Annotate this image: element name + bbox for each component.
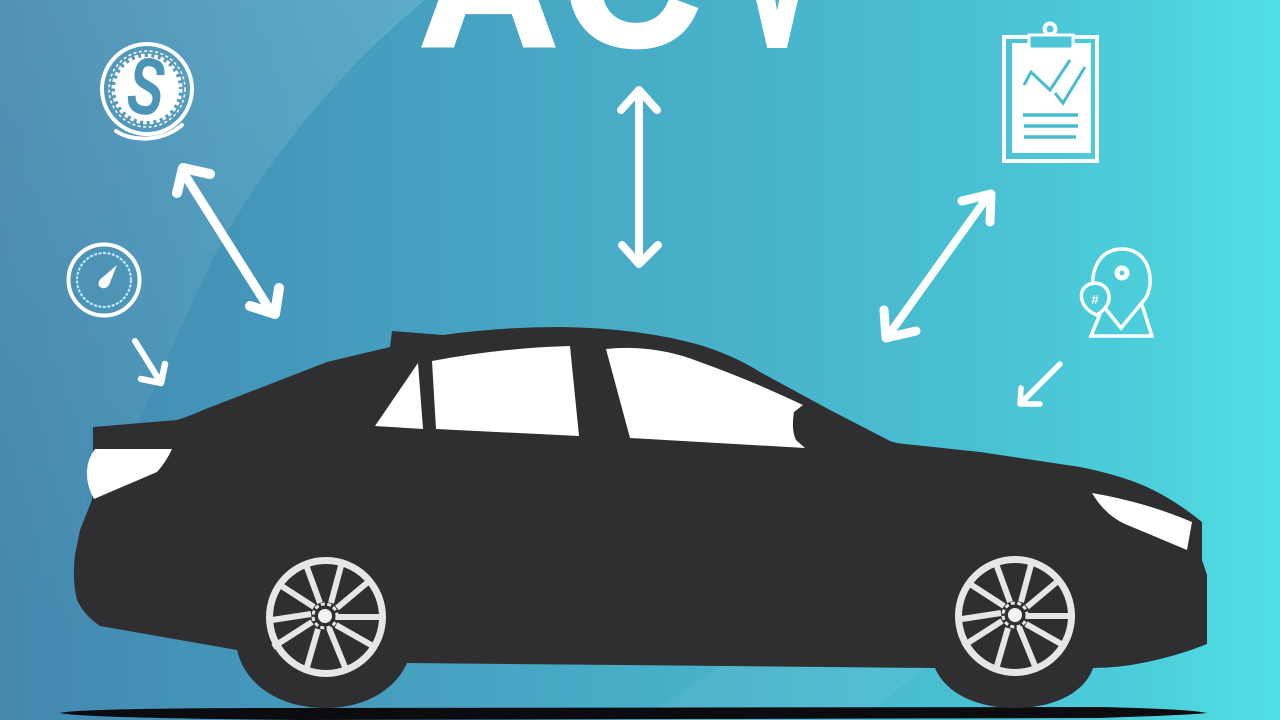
middle window [432, 346, 579, 436]
icon: dollar coin [102, 38, 192, 139]
icon: map location pin [1081, 249, 1152, 336]
car silhouette [74, 327, 1207, 708]
front window [606, 348, 805, 448]
icon: map location pin: # [1091, 292, 1099, 307]
icon: dollar coin: S [120, 38, 174, 134]
icon: speedometer gauge [68, 244, 140, 316]
arrow: clipboard to car [884, 194, 991, 338]
car body [74, 327, 1207, 708]
rear wheel [270, 560, 382, 674]
arrow: dollar to car [177, 168, 279, 314]
arrow: ACV to car [621, 90, 658, 264]
headlight [1092, 493, 1192, 550]
icon: clipboard [1004, 24, 1097, 161]
rear quarter window [375, 363, 423, 429]
rear light [87, 449, 172, 499]
arrow: pin to car [1020, 364, 1060, 404]
front wheel [958, 560, 1072, 672]
arrow: gauge to car [135, 341, 165, 383]
background light sheen [0, 0, 425, 720]
ground shadow [60, 707, 1207, 720]
